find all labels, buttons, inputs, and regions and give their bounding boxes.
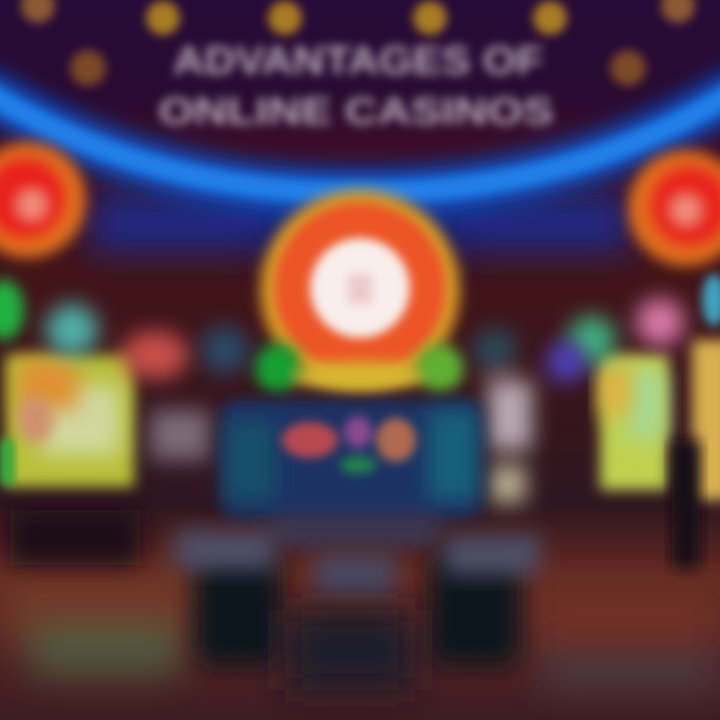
right badge xyxy=(628,150,720,266)
left badge xyxy=(0,142,86,258)
machine screen symbols xyxy=(282,416,416,474)
blue neon arc xyxy=(0,88,720,192)
badge base xyxy=(254,344,464,392)
right game panels xyxy=(546,274,720,570)
centre badge xyxy=(260,190,460,390)
floor xyxy=(0,570,720,690)
left game panel xyxy=(0,280,189,487)
title: ADVANTAGES OF xyxy=(173,39,543,83)
central slot machine xyxy=(222,400,480,545)
title xyxy=(158,39,554,133)
ceiling lights xyxy=(21,0,695,86)
side slot machines xyxy=(150,326,532,503)
chairs and players xyxy=(10,510,540,690)
title: ONLINE CASINOS xyxy=(158,91,554,133)
navy band under arc xyxy=(90,195,630,265)
